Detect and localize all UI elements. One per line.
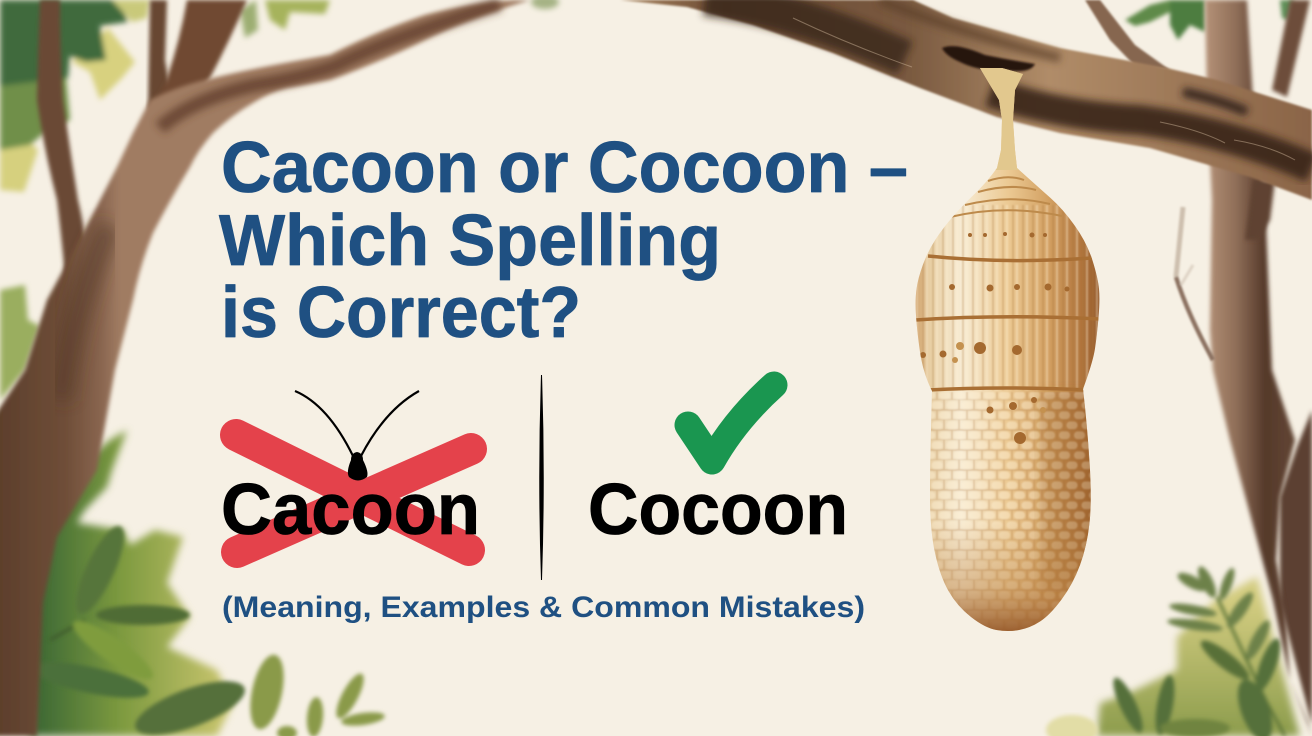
foliage: bottom left [29, 430, 386, 736]
icon: moth antennae and body [295, 391, 419, 480]
upper limb [150, 0, 247, 110]
cocoon body [916, 68, 1099, 631]
correct spelling with check mark [588, 385, 848, 550]
branch knot hole [942, 46, 1035, 71]
wrong word: Cacoon [221, 470, 480, 550]
small middle limb [148, 0, 172, 110]
bare side twig [1176, 207, 1213, 360]
main branch [620, 0, 1312, 200]
wrong spelling with red cross and moth [221, 391, 480, 552]
tree: right [1085, 0, 1312, 736]
arching branch shading [160, 4, 500, 128]
dark bark streaks [705, 0, 1312, 168]
subtitle: (Meaning, Examples & Common Mistakes) [222, 591, 865, 624]
vertical divider [540, 375, 543, 580]
far right trunk [1280, 410, 1312, 725]
foliage: top left [0, 0, 559, 400]
thin upper right branch [1272, 0, 1310, 97]
leaves [67, 521, 133, 619]
title line 1: Cacoon or Cocoon – [221, 128, 908, 208]
cocoon illustration [916, 68, 1100, 631]
title [219, 128, 908, 353]
foliage: top right [1125, 0, 1294, 40]
icon: green check [688, 385, 774, 461]
icon: red cross [236, 435, 471, 552]
title line 3: is Correct? [221, 273, 581, 353]
lower side limb [1245, 180, 1275, 240]
correct word: Cocoon [588, 470, 848, 550]
pale bark cracks [793, 18, 1295, 160]
foliage: bottom right [1046, 564, 1300, 736]
cocoon texture [916, 68, 1099, 631]
title line 2: Which Spelling [219, 201, 721, 281]
tree: left [0, 0, 530, 736]
right trunk [1205, 0, 1312, 736]
trunk and arching branch [0, 0, 530, 736]
upper left limb [37, 0, 90, 330]
trunk shading [60, 225, 110, 400]
thin branch to branch [1085, 0, 1170, 70]
